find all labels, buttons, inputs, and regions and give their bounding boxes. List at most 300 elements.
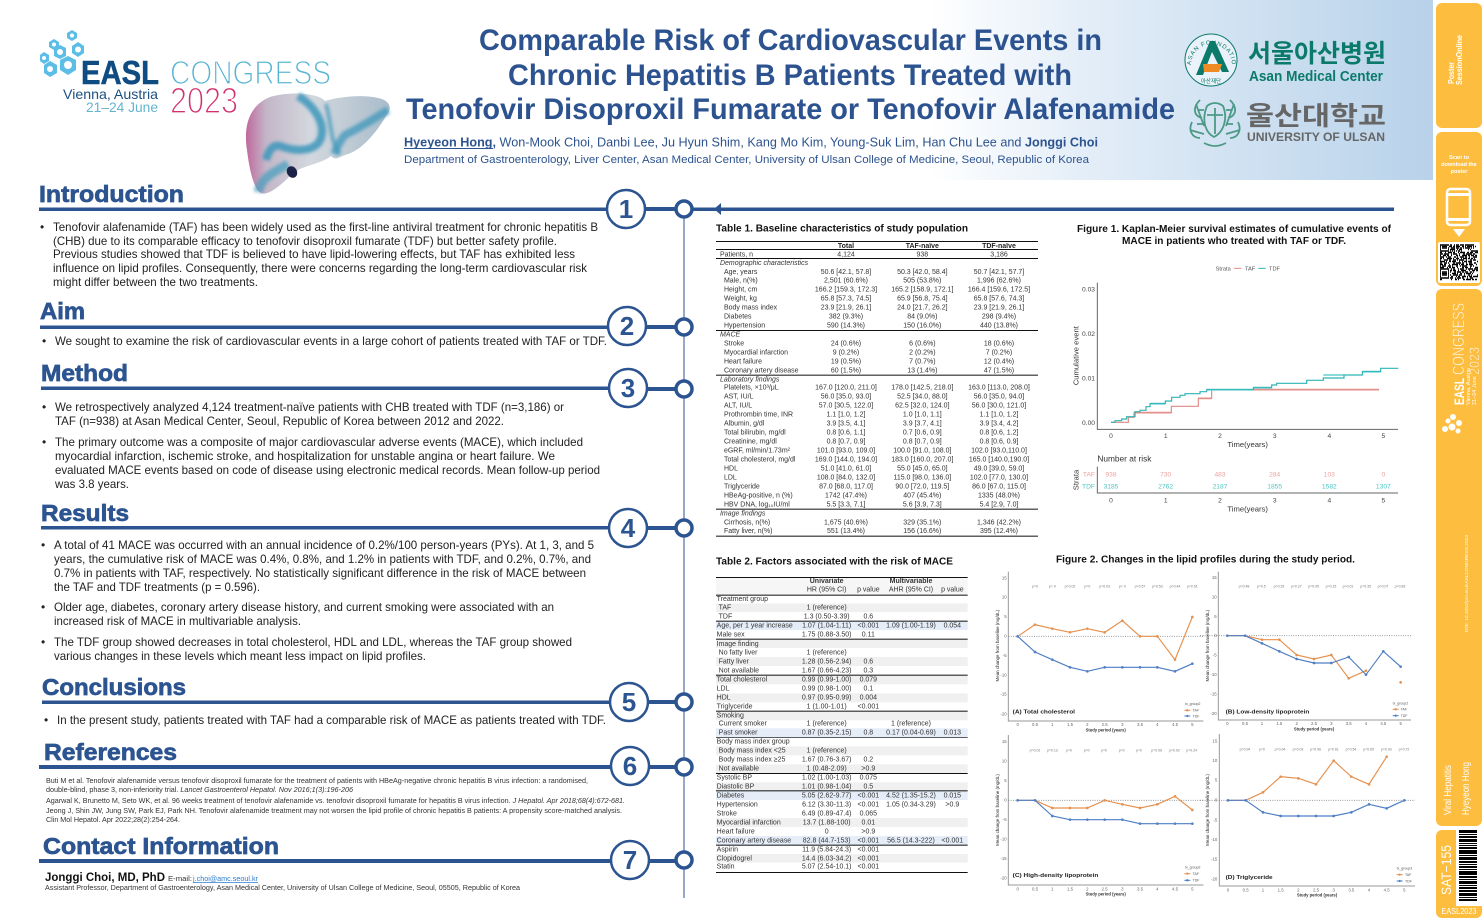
chart D: triglyceride: 0 — [1215, 798, 1218, 803]
chart B: low-density lipoprotein: p=0.27 — [1291, 584, 1302, 588]
table 1: baseline characteristics: 166.4 [159.6, 172.5] — [968, 287, 1030, 294]
chart B: low-density lipoprotein: p=0.07 — [1378, 584, 1388, 588]
table 2: factors associated with MACE: Current smoker — [719, 721, 767, 728]
table 2: factors associated with MACE: Past smoker — [719, 730, 758, 737]
chart A: total cholesterol: p=0 — [1032, 584, 1038, 588]
chart C: high-density lipoprotein: 1.5 — [1067, 887, 1074, 892]
chart A: total cholesterol: Mean change from baseline (mg/dL) — [995, 609, 1000, 681]
title: Tenofovir Disoproxil Fumarate or Tenofovir Alafenamide — [406, 93, 1175, 126]
table 2: factors associated with MACE: 1.02 (1.00-1.03) — [802, 774, 852, 781]
chart A: total cholesterol: -5 — [1003, 653, 1007, 658]
chart B: low-density lipoprotein: p=0.29 — [1274, 584, 1284, 588]
table 1: baseline characteristics: Fatty liver, n(%) — [724, 528, 773, 535]
table 1: baseline characteristics: Body mass index — [724, 305, 778, 312]
table 2: factors associated with MACE: Myocardial infarction — [717, 820, 781, 827]
section: Introduction: Previous studies showed that TDF is believed to have lipid-lowering effects, but TAF has exhibited less — [53, 247, 575, 261]
table 2: factors associated with MACE: 0.054 — [944, 623, 961, 630]
chart D: triglyceride: 10 — [1213, 758, 1218, 763]
chart B: low-density lipoprotein: p=0.15 — [1326, 584, 1336, 588]
table 1: baseline characteristics: 7 (0.2%) — [986, 350, 1012, 357]
University of Ulsan logo — [1190, 100, 1386, 146]
table 2: factors associated with MACE: 1.67 (0.76-3.67) — [802, 757, 852, 764]
chart D: triglyceride: -10 — [1211, 837, 1218, 842]
chart A: total cholesterol: 0 — [1004, 634, 1007, 639]
table 2: factors associated with MACE: 1.3 (0.50-3.39) — [804, 613, 850, 620]
table 1: baseline characteristics: 0.8 [0.6, 1.2] — [980, 430, 1018, 437]
right column header rule — [691, 203, 1394, 215]
icon: EASL hexagons white — [1442, 414, 1462, 434]
table 1: baseline characteristics: 150 (16.0%) — [903, 323, 941, 330]
table 1: baseline characteristics: 5.6 [3.9, 7.3] — [903, 501, 942, 508]
table 1: baseline characteristics: 23.9 [21.9, 26.1] — [821, 305, 871, 312]
section: Method: • — [42, 400, 46, 414]
icon: arrow down — [1453, 229, 1465, 237]
chart C: high-density lipoprotein: 15 — [1002, 739, 1007, 744]
chart A: total cholesterol: tx_group2 — [1185, 702, 1201, 706]
table 1: baseline characteristics: 0.8 [0.7, 0.9] — [903, 439, 942, 446]
table 2: factors associated with MACE: Smoking — [717, 713, 744, 720]
table 1: baseline characteristics: HBeAg-positive, n (%) — [724, 492, 793, 499]
sidebar panel: Poster Session Online — [1436, 3, 1482, 128]
table 2: factors associated with MACE: Multivariable — [890, 578, 932, 585]
table 1: baseline characteristics: 0.8 [0.7, 0.9] — [827, 439, 865, 446]
table 2: factors associated with MACE: >0.9 — [861, 766, 875, 773]
chart C: high-density lipoprotein: Mean change from baseline (mg/dL) — [995, 774, 1000, 846]
table 2: factors associated with MACE: <0.001 — [858, 856, 879, 863]
table 2: factors associated with MACE: 0.6 — [863, 613, 873, 620]
table 1: baseline characteristics: 47 (1.5%) — [984, 368, 1014, 375]
chart C: high-density lipoprotein: 2.5 — [1102, 887, 1108, 892]
chart D: triglyceride: 1 — [1262, 888, 1265, 893]
chart B: low-density lipoprotein: -10 — [1210, 672, 1217, 677]
chart D: triglyceride: -5 — [1213, 817, 1218, 822]
TAF curve — [1111, 390, 1379, 422]
figure 1: Kaplan-Meier chart — [1071, 266, 1398, 514]
table 1: baseline characteristics: AST, IU/L — [724, 394, 754, 401]
table 1: baseline characteristics: HBV DNA, log₁₀IU/ml — [724, 501, 790, 508]
chart C: high-density lipoprotein: (C) High-density lipoprotein — [1013, 873, 1099, 879]
number at risk table: 0 — [1109, 497, 1113, 504]
table 1: baseline characteristics: 7 (0.7%) — [909, 359, 936, 366]
table 2: factors associated with MACE: <0.001 — [858, 847, 879, 854]
table 1: baseline characteristics: 102.0 [77.0, 130.0] — [970, 475, 1028, 482]
table 1: baseline characteristics: 100.0 [91.0, 108.0] — [893, 448, 952, 455]
table 2: factors associated with MACE: Treatment group — [717, 596, 768, 603]
table 1: baseline characteristics: 57.0 [30.5, 122.0] — [819, 402, 873, 409]
figure 1: Kaplan-Meier chart: 0.00 — [1082, 420, 1095, 427]
number at risk table: 5 — [1381, 497, 1385, 504]
table 2: factors associated with MACE: Clopidogrel — [717, 856, 752, 863]
table 2: factors associated with MACE: Statin — [717, 864, 735, 871]
table 1: baseline characteristics: 551 (13.4%) — [827, 528, 865, 535]
section: Aim: Aim — [40, 298, 85, 324]
table 2: factors associated with MACE: 0.87 (0.35-2.15) — [802, 730, 852, 737]
table 2: factors associated with MACE: Diabetes — [717, 793, 745, 800]
University of Ulsan logo: UNIVERSITY OF ULSAN — [1247, 130, 1385, 144]
section: Method: The primary outcome was a composite of major cardiovascular adverse events (MACE), which included — [55, 435, 583, 449]
chart B: low-density lipoprotein: p=0.5 — [1257, 584, 1266, 588]
chart D: triglyceride: p=0.94 — [1240, 748, 1250, 752]
section: Aim: • — [42, 334, 46, 348]
chart B: low-density lipoprotein: 4 — [1365, 721, 1368, 726]
table 2: factors associated with MACE: Total cholesterol — [717, 677, 768, 684]
table 1: baseline characteristics: 298 (9.4%) — [982, 314, 1016, 321]
table 1: baseline characteristics: TDF-naïve — [982, 243, 1016, 250]
table 2: factors associated with MACE: Body mass index ≥25 — [719, 757, 786, 764]
chart C: high-density lipoprotein: 0.5 — [1032, 887, 1039, 892]
chart A: total cholesterol: 3.5 — [1137, 722, 1144, 727]
table 1: baseline characteristics: 24 (0.6%) — [831, 341, 861, 348]
table 1: baseline characteristics: Stroke — [724, 341, 744, 348]
sidebar panel: EASL Congress details: Viral Hepatitis — [1442, 765, 1454, 815]
section: Results: increased risk of MACE in multivariable analysis. — [54, 614, 301, 628]
table 2: factors associated with MACE: <0.001 — [858, 793, 879, 800]
table 2: factors associated with MACE: 1 (reference) — [807, 650, 847, 657]
EASL Congress logo: CONGRESS — [170, 54, 331, 91]
section: Contact Information: Contact Information — [43, 833, 279, 859]
table 1: baseline characteristics: 169.0 [144.0, 194.0] — [815, 457, 877, 464]
table 1: baseline characteristics: Height, cm — [724, 287, 758, 294]
number at risk table: 3 — [1273, 497, 1277, 504]
chart A: total cholesterol: p= 0 — [1049, 584, 1056, 588]
table 2: factors associated with MACE: >0.9 — [945, 802, 959, 809]
chart A: total cholesterol: p=0.44 — [1170, 584, 1180, 588]
authors: Department of Gastroenterology, Liver Center, Asan Medical Center, University of Ulsan College of Medicine, Seoul, Republic of Korea — [404, 154, 1090, 166]
section: Introduction: Tenofovir alafenamide (TAF) has been widely used as the first-line antiviral treatment for chronic hepatitis B — [53, 220, 598, 234]
table 1: baseline characteristics: Total cholesterol, mg/dl — [724, 457, 796, 464]
table 1: baseline characteristics: 590 (14.3%) — [827, 323, 865, 330]
table 2: factors associated with MACE: 5.07 (2.54-10.1) — [802, 864, 852, 871]
section: Results: Results — [41, 500, 129, 526]
table 1: baseline characteristics: 19 (0.5%) — [831, 359, 861, 366]
table 2: factors associated with MACE: Hypertension — [717, 802, 758, 809]
chart D: triglyceride: 5 — [1215, 778, 1218, 783]
table 2: factors associated with MACE: 0.1 — [863, 686, 873, 693]
table 2: factors associated with MACE: <0.001 — [942, 838, 963, 845]
chart C: high-density lipoprotein — [995, 735, 1203, 897]
table 1: baseline characteristics: 62.5 [32.0, 124.0] — [895, 402, 950, 409]
table 1: baseline characteristics: 0.7 [0.6, 0.9] — [903, 430, 942, 437]
chart A: total cholesterol: -15 — [1000, 692, 1007, 697]
number at risk table: 483 — [1214, 472, 1226, 479]
chart D: triglyceride: 3 — [1332, 888, 1335, 893]
chart A: total cholesterol: 2.5 — [1102, 722, 1108, 727]
chart C: high-density lipoprotein: TDF — [1193, 879, 1199, 883]
marker 1 — [607, 190, 692, 228]
chart D: triglyceride: p=0.54 — [1346, 748, 1356, 752]
header gradient band — [930, 0, 1433, 180]
table 1: baseline characteristics: Myocardial infarction — [724, 350, 788, 357]
table 1: baseline characteristics: 60 (1.5%) — [831, 368, 861, 375]
table 1: baseline characteristics: 52.5 [34.0, 88.0] — [897, 394, 948, 401]
chart C: high-density lipoprotein: 2 — [1086, 887, 1089, 892]
sidebar panel: QR download: download the — [1441, 162, 1477, 168]
chart B: low-density lipoprotein: p=0.01 — [1343, 584, 1353, 588]
sidebar panel: Poster Session Online: Poster — [1447, 62, 1456, 84]
chart A: total cholesterol: 2 — [1086, 722, 1089, 727]
table 1: baseline characteristics: 167.0 [120.0, 211.0] — [815, 385, 877, 392]
table 2 title: Table 2. Factors associated with the risk of MACE — [716, 556, 953, 568]
table 2: factors associated with MACE: Aspirin — [717, 847, 738, 854]
chart D: triglyceride: TAF — [1405, 873, 1411, 877]
chart C: high-density lipoprotein: p=0 — [1101, 748, 1107, 752]
table 2: factors associated with MACE: p value — [941, 587, 964, 594]
section: Contact Information: j.choi@amc.seoul.kr — [192, 876, 259, 883]
number at risk table: 284 — [1269, 472, 1281, 479]
table 2: factors associated with MACE: <0.001 — [858, 704, 879, 711]
table 2: factors associated with MACE: 1.05 (0.34-3.29) — [886, 802, 936, 809]
section: Results: the TAF and TDF treatments (p = 0.596). — [54, 580, 260, 594]
TDF curve — [1111, 368, 1398, 422]
section: Introduction: influence on lipid profiles. Consequently, there were concerns regarding the long-term cardiovascular risk — [53, 261, 588, 275]
table 1: baseline characteristics: 0.8 [0.6, 1.1] — [827, 430, 865, 437]
table 1: baseline characteristics: 50.7 [42.1, 57.7] — [974, 269, 1024, 276]
chart B: low-density lipoprotein: 2 — [1295, 721, 1298, 726]
table 1: baseline characteristics: Triglyceride — [724, 484, 760, 491]
table 1: baseline characteristics: 55.0 [45.0, 65.0] — [897, 466, 948, 473]
table 2: factors associated with MACE: 1.28 (0.56-2.94) — [802, 659, 852, 666]
chart B: low-density lipoprotein: 0 — [1214, 633, 1217, 638]
chart C: high-density lipoprotein: p=0.24 — [1186, 748, 1197, 752]
legend: Strata — [1216, 266, 1232, 272]
table 2: factors associated with MACE: Triglyceride — [717, 704, 753, 711]
table 2: factors associated with MACE: 0.6 — [863, 659, 873, 666]
number at risk table: Number at risk — [1097, 453, 1152, 463]
section: Method — [41, 360, 692, 491]
number at risk table: 2187 — [1213, 484, 1228, 491]
figure 1: Kaplan-Meier chart: 4 — [1327, 433, 1331, 440]
chart D: triglyceride: 4 — [1368, 888, 1371, 893]
chart B: low-density lipoprotein: 5 — [1399, 721, 1402, 726]
table 2: factors associated with MACE: Stroke — [717, 811, 737, 818]
chart B: low-density lipoprotein: p=0.48 — [1239, 584, 1249, 588]
title: Comparable Risk of Cardiovascular Events in — [479, 24, 1102, 57]
table 2: factors associated with MACE: Univariate — [810, 578, 844, 585]
table 2: factors associated with MACE: 14.4 (6.03-34.2) — [802, 856, 852, 863]
authors: Hyeyeon Hong, Won-Mook Choi, Danbi Lee, Ju Hyun Shim, Kang Mo Kim, Young-Suk Lim, Han Chu Lee and Jonggi Choi — [404, 136, 1098, 150]
chart B: low-density lipoprotein: 5 — [1214, 614, 1217, 619]
table 2: factors associated with MACE: 6.49 (0.89-47.4) — [802, 811, 852, 818]
section: Aim — [40, 298, 692, 348]
section: Method: evaluated MACE events based on code of disease using electronic medical records. Mean follow-up period — [55, 463, 600, 477]
legend: TDF — [1269, 266, 1281, 272]
table 1: baseline characteristics: 382 (9.3%) — [829, 314, 863, 321]
chart A: total cholesterol: 0 — [1016, 722, 1019, 727]
chart A: total cholesterol: p=0 — [1084, 584, 1090, 588]
section: Conclusions: Conclusions — [42, 674, 186, 700]
section: References: double-blind, phase 3, non-inferiority trial. Lancet Gastroenterol Hepatol. Nov 2016;1(3):196-206 — [46, 787, 353, 794]
section: Method: • — [42, 435, 46, 449]
table 2: factors associated with MACE: Male sex — [717, 632, 745, 639]
section: Method: Method — [41, 360, 128, 386]
table 1: baseline characteristics: 5.5 [3.3, 7.1] — [827, 501, 865, 508]
table 1: baseline characteristics: Image findings — [720, 511, 766, 518]
table 1: baseline characteristics: ALT, IU/L — [724, 402, 752, 409]
chart C: high-density lipoprotein: 0 — [1004, 798, 1007, 803]
table 2: factors associated with MACE: 1.67 (0.66-4.23) — [802, 668, 852, 675]
icon: EASL hexagon cluster — [40, 30, 84, 77]
title: Chronic Hepatitis B Patients Treated with — [508, 59, 1072, 92]
chart C: high-density lipoprotein: p=0.06 — [1151, 748, 1162, 752]
sidebar panel: EASL Congress details: 21–24 June — [1472, 376, 1478, 405]
table 2: factors associated with MACE: Not available — [719, 668, 759, 675]
table 1: baseline characteristics: 5.4 [2.9, 7.0] — [980, 501, 1018, 508]
sidebar panel: QR download: poster — [1451, 169, 1468, 175]
table 1: baseline characteristics — [716, 241, 1038, 537]
number at risk table: Time(years) — [1227, 505, 1268, 514]
chart D: triglyceride: p=0.93 — [1381, 748, 1392, 752]
section: Contact Information — [39, 833, 692, 892]
table 1: baseline characteristics: 86.0 [67.0, 115.0] — [972, 484, 1026, 491]
table 2: factors associated with MACE: 0.17 (0.04-0.69) — [886, 730, 936, 737]
chart A: total cholesterol: p= 0 — [1119, 584, 1126, 588]
table 2: factors associated with MACE: 11.9 (5.84-24.3) — [802, 847, 851, 854]
chart C: high-density lipoprotein: tx_group2 — [1185, 866, 1201, 870]
chart B: low-density lipoprotein: p=0.05 — [1308, 584, 1319, 588]
chart A: total cholesterol — [995, 572, 1203, 733]
figure 1: Kaplan-Meier chart: 5 — [1381, 433, 1385, 440]
chart B: low-density lipoprotein: tx_group2 — [1393, 701, 1408, 705]
chart B: low-density lipoprotein: 10 — [1212, 595, 1217, 600]
number at risk table: 938 — [1105, 472, 1117, 479]
table 2: factors associated with MACE: HDL — [717, 695, 731, 702]
University of Ulsan logo: 울산대학교 — [1246, 101, 1386, 131]
section: References — [39, 739, 692, 824]
table 1: baseline characteristics: MACE — [720, 332, 741, 339]
table 2: factors associated with MACE: 0.99 (0.98-1.00) — [802, 686, 852, 693]
timeline spine — [683, 209, 685, 898]
table 1: baseline characteristics: 1,996 (62.6%) — [977, 278, 1021, 285]
section: Introduction: • — [40, 220, 44, 234]
chart A: total cholesterol: 1 — [1051, 722, 1054, 727]
figure 1: Kaplan-Meier chart: 0.02 — [1082, 331, 1095, 338]
table 1: baseline characteristics: Prothrombin time, INR — [724, 412, 793, 419]
section: Introduction: (CHB) due to its comparable efficacy to tenofovir disoproxil fumarate (TDF) but better safety profile. — [53, 234, 557, 248]
table 1: baseline characteristics: Male, n(%) — [724, 278, 758, 285]
table 1: baseline characteristics: 2 (0.2%) — [909, 350, 936, 357]
section: Results: years, the cumulative risk of MACE was 0.4%, 0.8%, and 1.2% in patients with TDF, and 0.2%, 0.7%, and — [54, 552, 591, 566]
number at risk table: TAF — [1083, 471, 1095, 478]
chart D: triglyceride: (D) Triglyceride — [1226, 875, 1273, 881]
chart C: high-density lipoprotein: 0 — [1016, 887, 1019, 892]
table 1: baseline characteristics: HDL — [724, 466, 738, 473]
chart B: low-density lipoprotein: 1.5 — [1276, 721, 1283, 726]
number at risk table — [1071, 453, 1398, 514]
table 1: baseline characteristics: 163.0 [113.0, 208.0] — [968, 385, 1030, 392]
sidebar panel: EASL Congress details: CONGRESS — [1449, 303, 1468, 375]
figure 1: Kaplan-Meier chart: 2 — [1218, 433, 1222, 440]
chart B: low-density lipoprotein: -5 — [1213, 653, 1217, 658]
table 2: factors associated with MACE: 6.12 (3.30-11.3) — [802, 802, 851, 809]
chart D: triglyceride: Mean change from baseline (mg/dL) — [1205, 774, 1210, 846]
table 1: baseline characteristics: 3,186 — [990, 252, 1008, 259]
table 2: factors associated with MACE: 0.015 — [944, 793, 961, 800]
table 1: baseline characteristics: 12 (0.4%) — [984, 359, 1014, 366]
table 1: baseline characteristics: 50.6 [42.1, 57.8] — [821, 269, 871, 276]
illustration: liver — [246, 94, 390, 194]
table 2: factors associated with MACE: 0.97 (0.95-0.99) — [802, 695, 852, 702]
Asan Medical Center logo — [1184, 34, 1386, 86]
chart D: triglyceride: -15 — [1211, 857, 1218, 862]
chart A: total cholesterol: -20 — [1000, 711, 1007, 716]
icon: smartphone — [1446, 189, 1471, 225]
chart B: low-density lipoprotein: 3 — [1330, 721, 1333, 726]
sidebar panel: session code and barcode: EASL2023 — [1442, 907, 1477, 916]
marker 7 — [611, 841, 692, 879]
marker 6: 6 — [623, 751, 637, 781]
table 1: baseline characteristics: 9 (0.2%) — [833, 350, 859, 357]
chart A: total cholesterol: 10 — [1002, 595, 1007, 600]
chart A: total cholesterol: 3 — [1121, 722, 1124, 727]
figure 1 title — [1077, 223, 1391, 247]
section: References: Jeong J, Shin JW, Jung SW, Park EJ, Park NH. Tenofovir alafenamide treatment may not worsen the lipid profile of chronic hepatitis B patients: A propensity score-matched analysis. — [46, 808, 622, 815]
section: Method: was 3.8 years. — [54, 477, 129, 491]
table 1: baseline characteristics: 3.9 [3.5, 4.1] — [827, 421, 865, 428]
table 2: factors associated with MACE: 1 (1.00-1.01) — [807, 704, 847, 711]
table 2: factors associated with MACE: No fatty liver — [719, 650, 758, 657]
marker 5 — [610, 683, 692, 721]
section: References: Clin Mol Hepatol. Apr 2022;28(2):254-264. — [46, 817, 180, 824]
table 2: factors associated with MACE: 1.09 (1.00-1.19) — [886, 623, 936, 630]
chart D: triglyceride: p=0.96 — [1310, 748, 1321, 752]
table 1: baseline characteristics: Demographic characteristics — [720, 260, 809, 267]
table 2: factors associated with MACE: LDL — [717, 686, 730, 693]
chart B: low-density lipoprotein: TAF — [1401, 708, 1407, 712]
table 2: factors associated with MACE: 0.004 — [860, 695, 877, 702]
table 2: factors associated with MACE: Coronary artery disease — [717, 838, 791, 845]
table 2: factors associated with MACE: Body mass index <25 — [719, 748, 786, 755]
section: Conclusions — [42, 674, 692, 727]
chart D: triglyceride: p=0.03 — [1293, 748, 1303, 752]
sidebar panel: EASL Congress details: Vienna, Austria — [1466, 367, 1472, 405]
section: References: Agarwal K, Brunetto M, Seto WK, et al. 96 weeks treatment of tenofovir alafenamide vs. tenofovir disoproxil fumarate for hepatitis B virus infection. J Hepatol. Apr 2018;68(4):672-681. — [46, 798, 625, 805]
table 2: factors associated with MACE: Not available — [719, 766, 759, 773]
table 2: factors associated with MACE: Age, per 1 year increase — [717, 623, 793, 630]
chart C: high-density lipoprotein: TAF — [1193, 872, 1199, 876]
table 2: factors associated with MACE: 0.013 — [944, 730, 961, 737]
chart A: total cholesterol: 4 — [1156, 722, 1159, 727]
table 2: factors associated with MACE: <0.001 — [858, 623, 879, 630]
chart A: total cholesterol: p=0.53 — [1152, 584, 1163, 588]
sidebar panel: EASL Congress details: 2023 — [1466, 347, 1482, 375]
table 1: baseline characteristics: 108.0 [84.0, 132.0] — [817, 475, 875, 482]
chart B: low-density lipoprotein: 2.5 — [1311, 721, 1318, 726]
table 2: factors associated with MACE: TAF — [719, 605, 731, 612]
table 2: factors associated with MACE: 0 — [825, 829, 829, 836]
table 1: baseline characteristics: 1.1 [1.0, 1.2] — [980, 412, 1018, 419]
sidebar panel: session code and barcode — [1436, 830, 1482, 918]
table 2: factors associated with MACE: 1 (reference) — [807, 721, 847, 728]
chart A: total cholesterol: TDF — [1193, 714, 1199, 718]
table 1: baseline characteristics: 65.9 [56.8, 75.4] — [897, 296, 948, 303]
table 1: baseline characteristics: Platelets, ×10³/μL — [724, 385, 779, 392]
table 1: baseline characteristics: 1742 (47.4%) — [825, 492, 867, 499]
section: Results: 0.7% in patients with TAF, respectively. No statistically significant difference in the risk of MACE between — [54, 566, 586, 580]
table 2: factors associated with MACE: <0.001 — [858, 802, 879, 809]
Asan Medical Center logo: Asan Medical Center — [1249, 69, 1383, 85]
section: Results: The TDF group showed decreases in total cholesterol, HDL and LDL, whereas the TAF group showed — [54, 635, 572, 649]
table 1: baseline characteristics: 13 (1.4%) — [907, 368, 937, 375]
marker 7: 7 — [623, 845, 637, 875]
chart D: triglyceride: 2.5 — [1313, 888, 1320, 893]
chart A: total cholesterol: p=0.51 — [1187, 584, 1198, 588]
table 1: baseline characteristics: 65.8 [57.6, 74.3] — [974, 296, 1024, 303]
axes — [1097, 283, 1398, 429]
figure 1 title: Figure 1. Kaplan-Meier survival estimates of cumulative events of — [1077, 223, 1391, 235]
section: Contact Information: Assistant Professor, Department of Gastroenterology, Asan Medical Center, University of Ulsan College of Medicine, Seoul, 05505, Republic of Korea — [45, 885, 520, 892]
table 2: factors associated with MACE: 0.8 — [863, 730, 873, 737]
number at risk table: 730 — [1160, 472, 1172, 479]
